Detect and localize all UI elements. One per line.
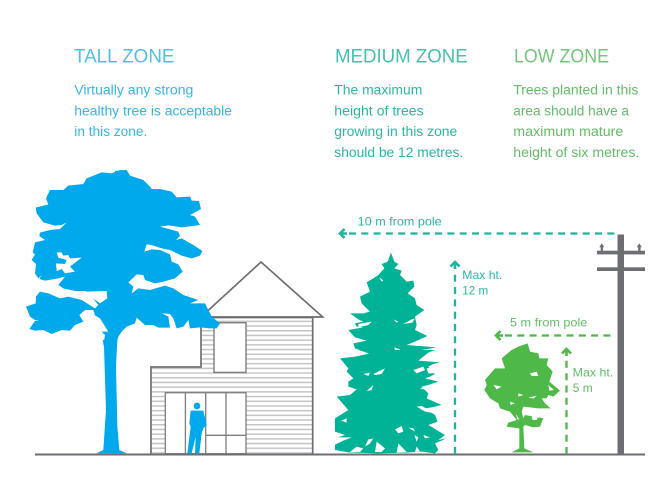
label: 5 m from pole: 5 m from pole (510, 316, 588, 330)
text block: tall zone description (74, 82, 232, 139)
text block: medium zone description: height of trees (334, 103, 424, 118)
label: 10 m from pole: 10 m from pole (358, 215, 442, 229)
text block: medium zone description (334, 82, 463, 160)
heading: medium zone: MEDIUM ZONE (335, 45, 468, 67)
label: max height 5 m: 5 m (573, 381, 593, 395)
tall tree: right crown (115, 170, 220, 345)
panel: medium zone text (334, 45, 468, 160)
text block: tall zone description: healthy tree is acceptable (74, 103, 232, 118)
panel: tall zone text (74, 45, 232, 139)
text block: medium zone description: should be 12 metres. (334, 145, 463, 160)
text block: low zone description: maximum mature (513, 124, 623, 139)
medium tree: upper half (348, 253, 437, 354)
house (151, 262, 323, 454)
text block: tall zone description: in this zone. (74, 124, 147, 139)
low tree (484, 343, 560, 452)
panel: low zone text (513, 45, 639, 160)
tall tree: trunk (97, 340, 127, 453)
text block: low zone description: area should have a (513, 103, 629, 118)
arrow: 5 m from pole (496, 331, 615, 340)
label: max height 5 m (573, 366, 613, 395)
heading: tall zone: TALL ZONE (74, 45, 174, 67)
label: max height 5 m: Max ht. (573, 366, 613, 380)
house outline (151, 318, 313, 454)
medium tree (334, 253, 447, 453)
house siding (152, 318, 312, 454)
icon: power pole (597, 234, 645, 454)
arrow: 10 m from pole (340, 229, 615, 238)
label: max height 12 m (462, 268, 502, 298)
ground line (35, 454, 645, 456)
text block: low zone description (513, 82, 639, 160)
medium tree: lower half (334, 350, 447, 453)
upper window (214, 323, 246, 372)
label: max height 12 m: Max ht. (462, 268, 502, 282)
tall tree: left crown (26, 170, 127, 345)
icon: person (187, 403, 207, 453)
arrow: low max height (562, 349, 571, 454)
arrow: medium max height (450, 262, 460, 454)
house roof (201, 262, 323, 317)
text block: tall zone description: Virtually any strong (74, 82, 193, 97)
label: max height 12 m: 12 m (462, 284, 488, 298)
glazed door (165, 393, 246, 454)
text block: low zone description: height of six metres. (513, 145, 639, 160)
text block: medium zone description: The maximum (334, 82, 422, 97)
text block: low zone description: Trees planted in this (513, 82, 639, 97)
heading: low zone: LOW ZONE (514, 45, 609, 67)
text block: medium zone description: growing in this zone (334, 124, 457, 139)
tall tree (26, 170, 220, 453)
